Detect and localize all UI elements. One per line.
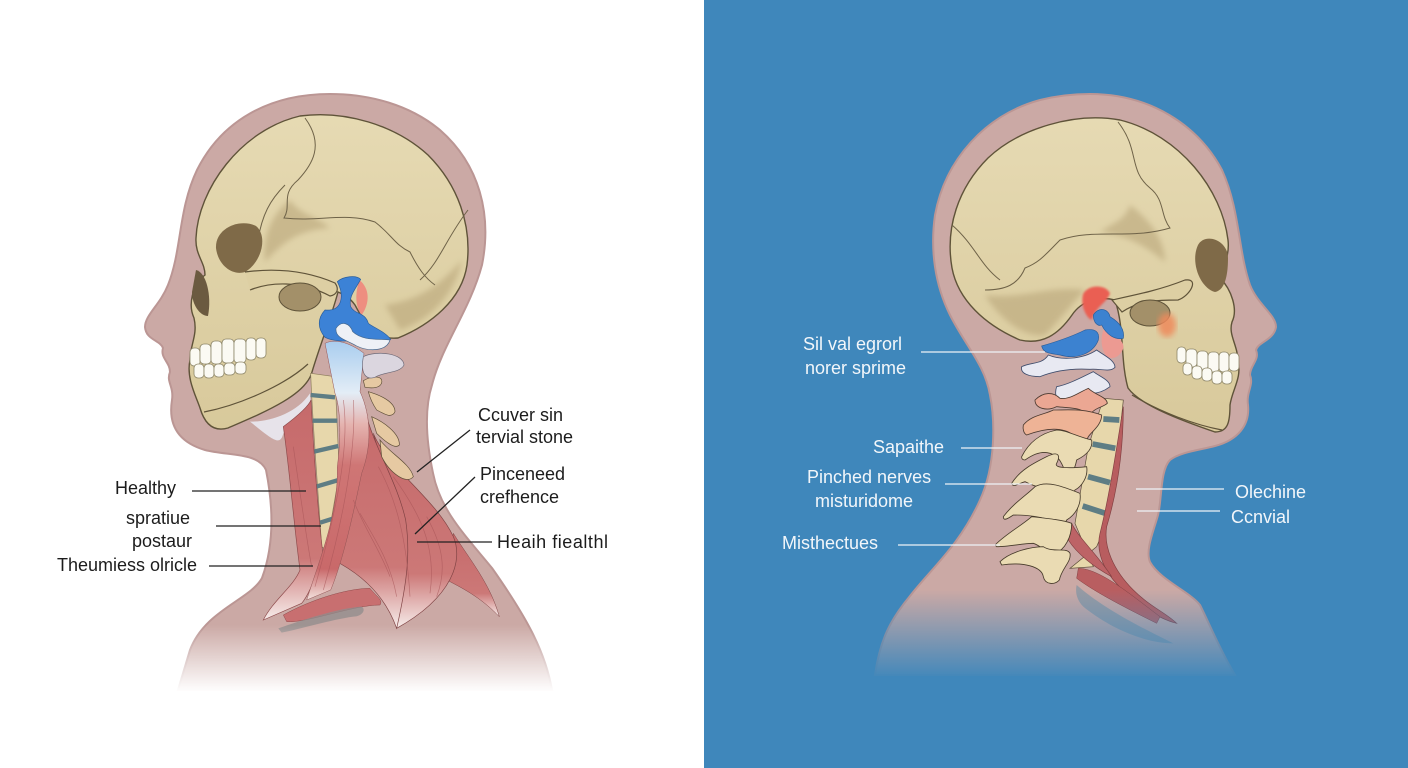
front neck muscles [263, 400, 323, 620]
label: heaih fiealthl: Heaih fiealthl [497, 532, 608, 552]
shoulder shadows [1076, 585, 1173, 643]
label: pinched nerves [807, 467, 1032, 511]
muscle fibres [293, 400, 442, 597]
skull sutures [258, 118, 468, 285]
nasal opening [192, 270, 209, 316]
label: sil val egrorl: Sil val egrorl [803, 334, 902, 354]
label: pinched nerves: Pinched nerves [807, 467, 931, 487]
cervical vertebra five [1003, 484, 1080, 526]
label: spratiue postaur [126, 508, 321, 551]
label: ccuver sin [417, 405, 573, 472]
red inflamed disc [1102, 330, 1123, 358]
label: pinceneed [415, 464, 565, 534]
cervical vertebra three [1022, 430, 1092, 474]
deep neck muscle [333, 410, 408, 628]
cervical vertebra seven [1000, 547, 1070, 583]
inflamed spot [356, 280, 368, 315]
eye socket [216, 223, 262, 273]
inflamed nerve area [1082, 286, 1110, 320]
cervical discs [311, 395, 339, 523]
panel: misaligned background [704, 0, 1408, 768]
skull fill [950, 118, 1239, 432]
label: ccuver sin: tervial stone [476, 427, 573, 447]
trapezius muscle [373, 433, 457, 628]
labels: healthy side [57, 405, 608, 575]
red vertebra one [1035, 388, 1107, 417]
shoulder shadow [278, 607, 364, 633]
label: pinceneed: Pinceneed [480, 464, 565, 484]
panel: healthy background [0, 0, 704, 768]
anterior muscle strip [1099, 407, 1177, 623]
skull base shading [264, 200, 462, 330]
sternocleidomastoid muscle [307, 341, 369, 600]
figure: healthy neck [145, 94, 580, 692]
facial skull and cranium fill [189, 115, 468, 429]
grey articular bone [362, 353, 404, 378]
label: ccnvial: Ccnvial [1231, 507, 1290, 527]
vertebral bodies [1070, 398, 1123, 568]
teeth [190, 338, 266, 378]
bottom fade [150, 625, 580, 692]
cheekbone arch [1112, 280, 1193, 312]
head and neck silhouette [145, 94, 552, 690]
shoulder muscle [1077, 568, 1160, 623]
label: sil val egrorl [803, 334, 1045, 378]
pale tendon under jaw [250, 393, 312, 440]
jaw line [204, 364, 308, 412]
rear strap muscle [447, 533, 499, 617]
eye socket [1195, 239, 1228, 292]
cervical vertebra four [1012, 454, 1087, 499]
label: spratiue postaur: postaur [132, 531, 192, 551]
labels: misaligned side [782, 334, 1306, 553]
skull base shading [985, 205, 1165, 335]
label: pinceneed: crefhence [480, 487, 559, 507]
label: pinched nerves: misturidome [815, 491, 913, 511]
teeth [1177, 347, 1239, 384]
inflamed cheek [1158, 313, 1176, 337]
label: olechine: Olechine [1235, 482, 1306, 502]
label: misthectues: Misthectues [782, 533, 878, 553]
blue joint capsule [1042, 310, 1124, 357]
white axis bone [1056, 372, 1110, 400]
label: spratiue postaur: spratiue [126, 508, 190, 528]
blue joint capsule [319, 277, 391, 343]
jaw line [1132, 395, 1222, 430]
label: theumiess olricle: Theumiess olricle [57, 555, 197, 575]
white bone of atlas [336, 324, 390, 350]
skull sutures [952, 122, 1170, 290]
white atlas bone [1021, 350, 1115, 377]
bottom fade [860, 590, 1260, 680]
label: sil val egrorl: norer sprime [805, 358, 906, 378]
cheekbone arch [245, 270, 337, 296]
clavicle band [283, 588, 381, 622]
label: ccuver sin: Ccuver sin [478, 405, 563, 425]
label: healthy: Healthy [115, 478, 176, 498]
head and neck silhouette [875, 94, 1276, 675]
figure: misaligned neck [860, 94, 1276, 680]
cheek opening [279, 283, 321, 311]
cervical spine [311, 373, 339, 550]
cervical discs [1083, 419, 1119, 513]
cheek opening [1130, 300, 1170, 326]
lower neck muscle [1068, 523, 1112, 577]
cervical vertebra six [995, 517, 1072, 554]
red vertebra two [1023, 410, 1102, 443]
spinous processes [363, 377, 413, 479]
label: sapaithe: Sapaithe [873, 437, 944, 457]
